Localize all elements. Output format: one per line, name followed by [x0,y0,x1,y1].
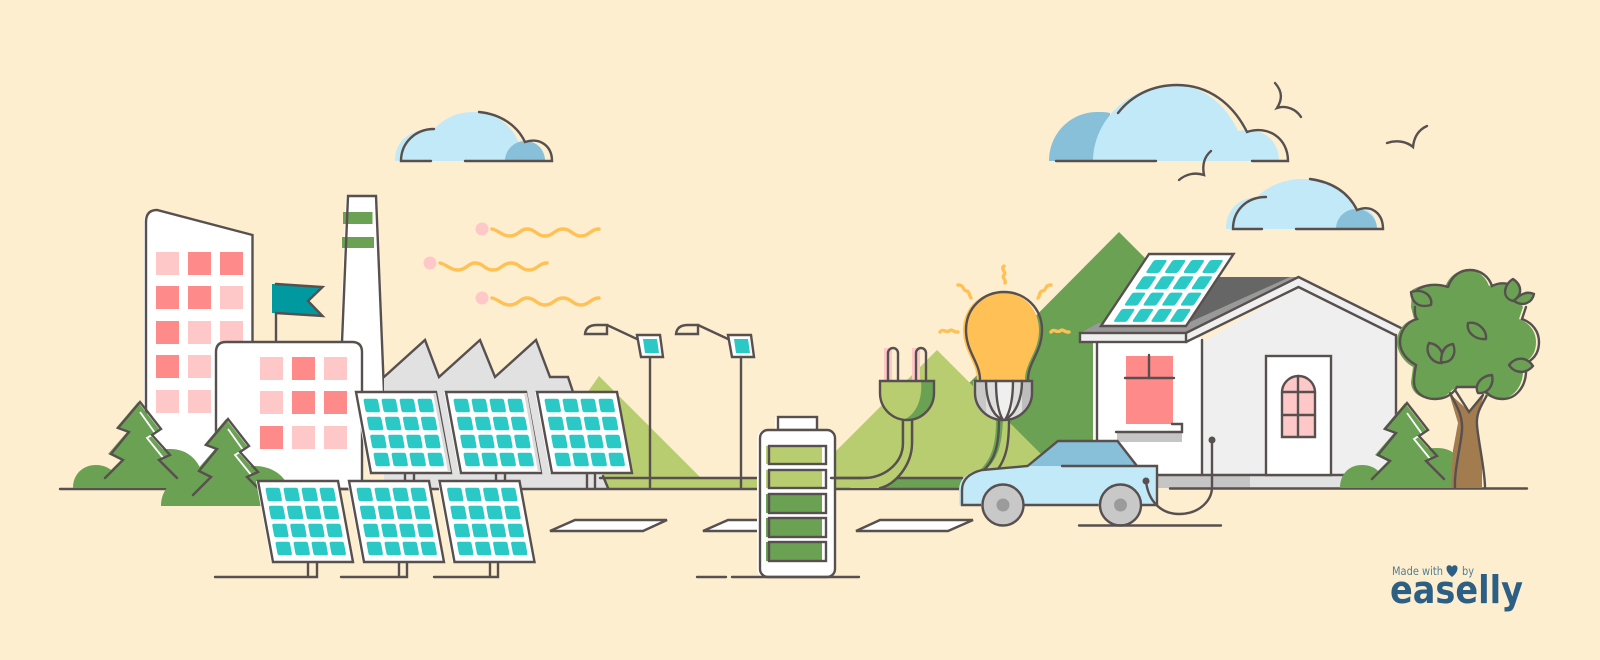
road upper line [600,420,962,488]
house: front wall [1093,338,1202,475]
cloud: small right [1226,179,1383,229]
flag [272,284,322,342]
light green mountains [520,350,1066,489]
house: door [1266,356,1331,475]
tall building [144,210,252,489]
pine tree 3 [1370,403,1444,488]
left ground line [60,488,1000,490]
chimney [338,196,384,400]
easelly logo: easelly [1390,568,1523,612]
road markings [550,520,973,531]
top row solar panels [354,392,632,488]
light bulb [963,292,1042,474]
right ground line [1170,487,1527,490]
rear wheel [1098,484,1141,526]
car outline [962,441,1157,505]
tree trunk [1449,390,1487,488]
bush by tree [1340,448,1456,488]
car body [959,466,1157,505]
plug [831,348,934,488]
house: window [1116,355,1182,442]
factory [384,340,608,488]
tree leaves [1411,279,1534,393]
heart [1446,565,1458,577]
dark green mountain [865,232,1180,488]
house: side wall [1202,287,1396,475]
birds [1179,83,1427,180]
house: dark roof [1080,277,1298,334]
car ground line [1079,524,1221,527]
car windows [1027,441,1137,466]
bottom row solar panels [215,481,534,577]
house: roof solar panel [1101,254,1234,326]
cloud: large [1049,85,1288,161]
low building [216,342,362,489]
pine tree 1 [103,402,177,487]
bulb rays [940,266,1069,332]
house: foundation [1152,475,1347,488]
house [1080,254,1401,488]
cloud: left [395,112,552,161]
car [959,441,1157,526]
easelly logo: Made with [1392,564,1443,578]
house: roof light strips [1080,277,1298,334]
street lamps [585,325,754,488]
pine tree 2 [191,419,265,504]
house: eave [1186,277,1401,342]
charging cable [1142,436,1216,514]
house: roof edge [1080,333,1186,342]
tree crown [1397,270,1539,399]
battery [697,417,859,577]
house: outlines [1097,277,1401,480]
oak tree [1397,270,1539,488]
heat waves [424,222,599,305]
easelly logo: by [1462,564,1474,578]
bushes [73,449,286,506]
front wheel [981,484,1024,526]
